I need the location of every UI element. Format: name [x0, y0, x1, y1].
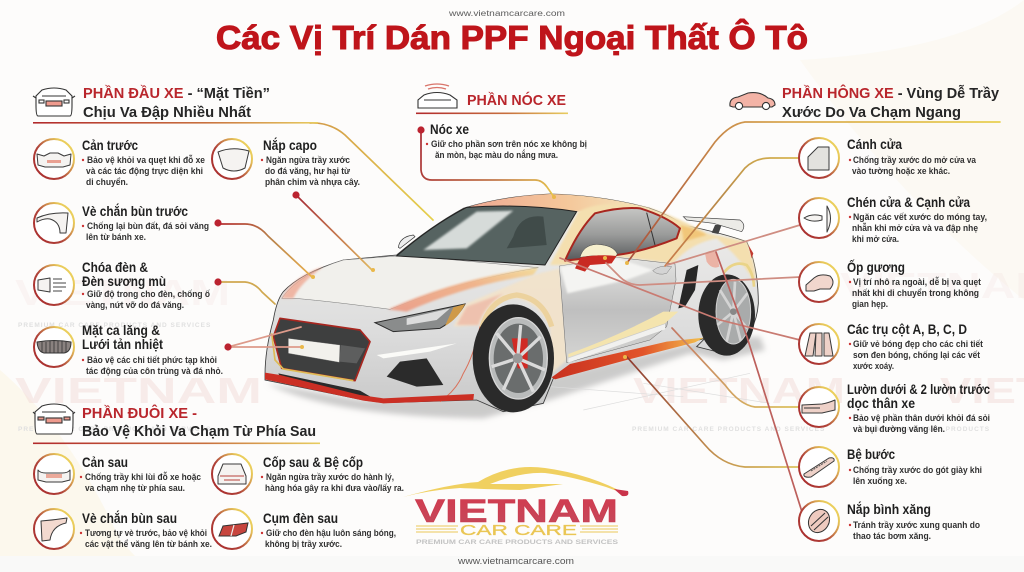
leader: roof: [421, 130, 554, 197]
item: rear fender: Tương tự vè trước, bảo vệ khỏi: [85, 528, 207, 538]
side window: [565, 208, 680, 261]
item: rocker panels: Bảo vệ phần thân dưới khỏi đá sỏi: [853, 413, 990, 423]
item: door cup and edge: Ngăn các vết xước do móng tay,: [853, 212, 987, 222]
item: door cup and edge: khi mở cửa.: [852, 234, 899, 244]
item: mirror cover: gian hẹp.: [852, 299, 888, 309]
section header: rear: [33, 404, 320, 444]
panel: front of car: [33, 85, 360, 376]
item: headlights and fog lamps: Giữ độ trong cho đèn, chống ố: [87, 289, 210, 299]
door handle: [653, 266, 672, 274]
leader: hood: [296, 195, 372, 270]
section header: front: [33, 85, 318, 124]
item: headlights and fog lamps: Chóa đèn &: [82, 260, 148, 275]
item: fuel cap: Nắp bình xăng: [847, 502, 931, 517]
item: door: [799, 137, 977, 178]
door lower white: [568, 324, 665, 363]
item: door sill: Chống trầy xước do gót giày khi: [853, 465, 982, 475]
item: hood: [212, 138, 360, 187]
item: grille: tác động của côn trùng và đá nhỏ.: [86, 366, 223, 376]
windshield: [397, 206, 577, 265]
item: front bumper: và các tác động trực diện khi: [86, 166, 203, 176]
item: fuel cap: thao tác bơm xăng.: [853, 531, 931, 541]
item: grille: Lưới tản nhiệt: [82, 337, 163, 352]
item: hood: do đá văng, hư hại từ: [265, 166, 350, 176]
item: mirror cover: Ốp gương: [847, 260, 905, 275]
item: door: Cánh cửa: [847, 137, 902, 152]
hood left corner wash: [282, 267, 323, 298]
leader: pillars: [560, 258, 800, 340]
leader lines: [214, 122, 1000, 512]
item: rocker panels: dọc thân xe: [847, 396, 915, 411]
floor shadow: [267, 337, 765, 418]
hood stripe: [388, 268, 538, 312]
floor lines: [550, 373, 770, 410]
watermark pattern: PREMIUM CAR CARE PRODUCTS AND SERVICES: [18, 426, 211, 433]
item: door: vào tường hoặc xe khác.: [852, 166, 950, 176]
item: fuel cap: [799, 501, 980, 541]
title: Các Vị Trí Dán PPF Ngoại Thất Ô Tô: [216, 18, 808, 56]
watermark pattern: VIETNAM: [633, 370, 845, 411]
item: trunk: Cốp sau & Bệ cốp: [263, 455, 363, 470]
fender orange patch: [457, 293, 503, 325]
item: headlights and fog lamps: vàng, nứt vỡ do đá văng.: [86, 300, 184, 310]
item: rocker panels: Lườn dưới & 2 lườn trước: [847, 382, 990, 397]
section header: side: PHẦN HÔNG XE - Vùng Dễ Trầy: [782, 84, 1000, 102]
item: hood: Nắp capo: [263, 138, 317, 153]
front lip: [265, 373, 474, 403]
panel: side of car: [730, 84, 1000, 541]
item: front fender: Vè chắn bùn trước: [82, 204, 188, 219]
leader: grille: [228, 327, 302, 347]
leader end dots: [300, 195, 629, 359]
item: rear bumper: [34, 454, 201, 494]
left mirror: [398, 235, 415, 248]
logo: Vietnam Car Care: CAR CARE: [460, 522, 577, 539]
leader: side section rule to door: [627, 122, 1000, 263]
logo swoosh: [403, 467, 628, 497]
item: front bumper: Cản trước: [82, 138, 138, 153]
item: door sill: [799, 447, 982, 487]
item: door cup and edge: [799, 195, 987, 244]
rear wheel arch band: [723, 264, 754, 287]
item: front fender: [34, 203, 209, 243]
side mirror: [575, 244, 617, 272]
leader: fuel cap: [716, 252, 802, 512]
item: door sill: lên xuống xe.: [853, 476, 907, 486]
icon: roof car: [418, 84, 457, 108]
windshield reflection: [423, 211, 513, 250]
pillar and rear quarter wash: [550, 204, 755, 283]
leader: front section rule to windshield: [310, 123, 433, 220]
rear wheel: [698, 274, 755, 356]
front fender wash: [453, 268, 567, 373]
front wheel: [473, 304, 554, 412]
item: rear bumper: Chống trầy khi lùi đỗ xe hoặc: [85, 472, 201, 482]
logo: Vietnam Car Care: PREMIUM CAR CARE PRODUCTS AND SERVICES: [416, 539, 619, 546]
watermark pattern: VIETNAM: [15, 370, 262, 411]
item: roof: Nóc xe: [430, 122, 469, 137]
logo: Vietnam Car Care: VIETNAM: [415, 493, 618, 529]
item: rear bumper: Cản sau: [82, 455, 128, 470]
leader: mirror: [606, 263, 800, 285]
headlight: [375, 304, 465, 332]
section header: rear: PHẦN ĐUÔI XE -: [82, 404, 197, 422]
watermark pattern: [15, 265, 1024, 433]
item: tail lights: [212, 509, 396, 549]
door panel: [559, 257, 676, 363]
item: door sill: Bệ bước: [847, 447, 895, 462]
item: front bumper: [34, 138, 205, 187]
leader: running board: [627, 357, 800, 467]
section header: front: PHẦN ĐẦU XE - “Mặt Tiền”: [83, 85, 270, 102]
tail light edge: [748, 245, 753, 258]
section header: side: Xước Do Va Chạm Ngang: [782, 104, 961, 121]
item: fuel cap: Tránh trầy xước xung quanh do: [853, 520, 980, 530]
leader: headlights: [218, 282, 275, 304]
panel: roof: [416, 84, 587, 160]
item: mirror cover: nhất khi di chuyển trong không: [852, 288, 979, 298]
section header: roof: [416, 84, 568, 114]
grille: [272, 318, 370, 381]
item: rocker panels: [799, 382, 990, 434]
item: front bumper: Bảo vệ khỏi va quẹt khi đỗ xe: [87, 155, 205, 165]
license plate: [288, 338, 340, 362]
watermark pattern: PREMIUM CAR CARE PRODUCTS AND SERVICES: [18, 322, 211, 329]
rear orange patch: [680, 225, 707, 242]
item: trunk: Ngăn ngừa trầy xước do hành lý,: [266, 472, 394, 482]
item: rear fender: các vật thể văng lên từ bánh xe.: [85, 539, 212, 549]
item: pillars: sơn đen bóng, chống lại các vết: [853, 350, 980, 360]
window pillar: [647, 213, 655, 245]
item: rear bumper: va chạm nhẹ từ phía sau.: [85, 483, 185, 493]
roof panel: [463, 194, 650, 212]
lower intake: [387, 358, 443, 387]
item: hood: phân chim và nhựa cây.: [265, 177, 360, 187]
panel: rear of car: [33, 404, 404, 549]
item: mirror cover: [799, 260, 981, 309]
section header: front: Chịu Va Đập Nhiều Nhất: [83, 104, 251, 121]
icon: front car: [33, 88, 75, 116]
watermark pattern: VIETNAM: [840, 265, 1024, 306]
top website url: www.vietnamcarcare.com: [448, 8, 565, 18]
item: roof: ăn mòn, bạc màu do nắng mưa.: [435, 149, 558, 160]
watermark pattern: VIETNAM: [15, 272, 230, 313]
black lip strip: [278, 373, 373, 398]
item: rear fender: Vè chắn bùn sau: [82, 511, 177, 526]
item: hood: Ngăn ngừa trầy xước: [266, 155, 350, 165]
spoiler: [683, 217, 744, 234]
item: roof: Giữ cho phần sơn trên nóc xe không bị: [431, 139, 587, 149]
car illustration: [265, 194, 770, 418]
item: headlights and fog lamps: [34, 260, 210, 310]
car body: [265, 194, 758, 412]
logo side lines: [416, 526, 618, 532]
watermark pattern: PREMIUM CAR CARE PRODUCTS: [860, 426, 990, 433]
leader: door cup: [667, 225, 800, 265]
windshield seats: [507, 216, 547, 248]
item: mirror cover: Vị trí nhô ra ngoài, dễ bị va quẹt: [853, 277, 981, 287]
item: front bumper: di chuyển.: [86, 177, 128, 187]
fuel cap: [705, 251, 719, 268]
item: trunk: hàng hóa gây ra khi đưa vào/lấy ra.: [265, 483, 404, 493]
item: grille: Mặt ca lăng &: [82, 323, 160, 338]
item: door cup and edge: nhẫn khi mở cửa và va đập nhẹ: [852, 223, 978, 233]
rear vent: [678, 265, 698, 308]
item: tail lights: không bị trầy xước.: [265, 539, 342, 549]
item: roof: [426, 122, 587, 160]
item: front fender: lên từ bánh xe.: [86, 232, 146, 242]
item: door: Chống trầy xước do mở cửa va: [853, 155, 977, 165]
section header: roof: PHẦN NÓC XE: [467, 91, 566, 109]
item: front fender: Chống lại bùn đất, đá sỏi văng: [87, 221, 209, 231]
front wheel arch band: [482, 295, 552, 328]
item: door cup and edge: Chén cửa & Cạnh cửa: [847, 195, 970, 210]
item: pillars: xước xoáy.: [853, 361, 894, 371]
door yellow stripe: [568, 312, 678, 357]
item: tail lights: Cụm đèn sau: [263, 511, 338, 526]
leader dots: [214, 126, 425, 351]
grille center panel: [339, 345, 365, 363]
door upper white: [560, 258, 653, 293]
hood: [282, 256, 538, 309]
leader: rocker: [672, 328, 800, 407]
item: pillars: Giữ vẻ bóng đẹp cho các chi tiết: [853, 339, 983, 349]
bumper highlight: [377, 343, 457, 358]
item: pillars: [799, 322, 983, 371]
side sill: [552, 338, 704, 379]
item: tail lights: Giữ cho đèn hậu luôn sáng bóng,: [266, 528, 396, 538]
leader: front fender: [218, 224, 312, 277]
item: headlights and fog lamps: Đèn sương mù: [82, 274, 166, 289]
item: rear fender: [34, 509, 212, 549]
item: trunk: [212, 454, 404, 494]
item: grille: [34, 323, 223, 376]
logo: Vietnam Car Care: [403, 467, 628, 546]
bottom website url: www.vietnamcarcare.com: [457, 555, 574, 566]
section header: side: [730, 84, 1000, 121]
section header: rear: Bảo Vệ Khỏi Va Chạm Từ Phía Sau: [82, 423, 316, 440]
bumper edge line: [440, 327, 480, 402]
item: pillars: Các trụ cột A, B, C, D: [847, 322, 967, 337]
item: rocker panels: và bụi đường văng lên.: [853, 424, 945, 434]
watermark pattern: PREMIUM CAR CARE PRODUCTS AND SERVICES: [632, 426, 825, 433]
leader: door: [665, 158, 800, 266]
icon: side car: [730, 93, 775, 110]
item: grille: Bảo vệ các chi tiết phức tạp khỏi: [87, 355, 217, 365]
icon: rear car: [33, 404, 75, 434]
